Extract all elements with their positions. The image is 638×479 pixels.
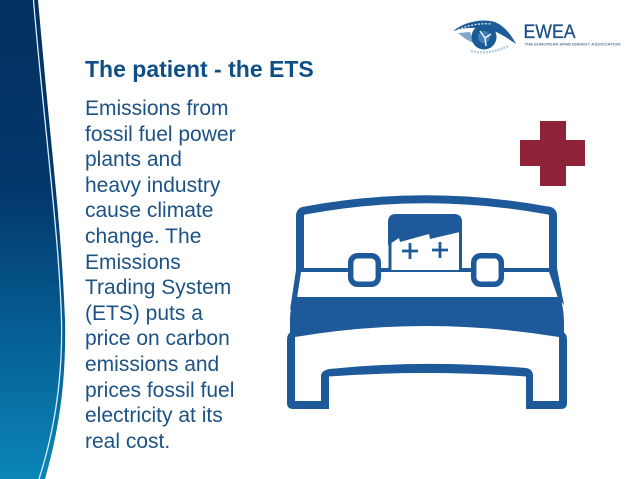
right pillow [474,256,501,284]
body text: prices fossil fuel [85,379,234,402]
body text: electricity at its [85,404,223,427]
body text: plants and [85,148,182,171]
body text: cause climate [85,199,213,222]
body text: emissions and [85,353,219,376]
body text: Trading System [85,276,231,299]
body text: heavy industry [85,174,220,197]
body text: Emissions from [85,97,229,120]
body text: (ETS) puts a [85,302,203,325]
headboard [300,199,553,272]
patient: factory outline [388,214,462,270]
body text [85,97,236,453]
bed frame [287,332,567,409]
mattress top line [300,268,553,272]
body text: Emissions [85,251,181,274]
logo tagline: THE EUROPEAN WIND ENERGY ASSOCIATION [524,42,621,46]
body text: real cost. [85,430,170,453]
left pillow [351,256,378,284]
title: The patient - the ETS [85,56,314,82]
body text: change. The [85,225,201,248]
icon: eye [453,20,516,52]
bed white inner [295,326,559,401]
body text: fossil fuel power [85,123,236,146]
logo wordmark: EWEA [524,21,576,43]
body text: price on carbon [85,327,230,350]
mattress sides [290,268,564,310]
blanket band [290,297,564,338]
